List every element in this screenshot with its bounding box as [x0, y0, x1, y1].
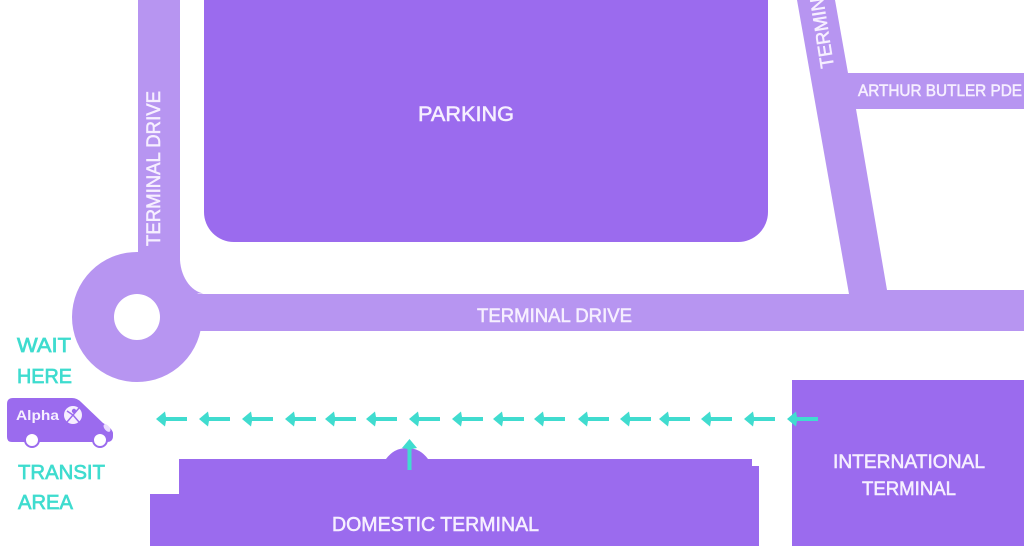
international terminal label: INTERNATIONAL — [833, 452, 985, 473]
label: transit area — [18, 462, 105, 514]
road network — [72, 0, 1024, 382]
parking label: PARKING — [418, 103, 514, 126]
label: horizontal Terminal Drive: TERMINAL DRIVE — [477, 306, 632, 327]
panel: international terminal — [792, 380, 1024, 546]
van wheels — [25, 433, 107, 447]
label: wait here: HERE — [17, 366, 72, 388]
road: vertical Terminal Drive — [138, 0, 208, 294]
road junction: curved inner corner — [180, 243, 230, 294]
arrows: walking route to transit area — [156, 412, 818, 470]
domestic terminal label: DOMESTIC TERMINAL — [332, 514, 539, 536]
road: roundabout — [72, 252, 202, 382]
panel: parking — [204, 0, 768, 242]
van logo badge — [64, 406, 82, 424]
panel: domestic terminal — [150, 448, 759, 546]
van logo text: Alpha — [16, 407, 59, 423]
label: wait here — [17, 335, 72, 388]
label: wait here: WAIT — [17, 335, 71, 357]
label: vertical Terminal Drive: TERMINAL DRIVE — [144, 91, 165, 246]
van window — [102, 423, 112, 433]
icon: Alpha van — [7, 398, 113, 447]
label: transit area: AREA — [18, 492, 74, 514]
road: horizontal, diagonal and Arthur Butler segments — [190, 0, 1024, 331]
international terminal label, second line: TERMINAL — [862, 479, 956, 500]
label: transit area: TRANSIT — [18, 462, 105, 484]
